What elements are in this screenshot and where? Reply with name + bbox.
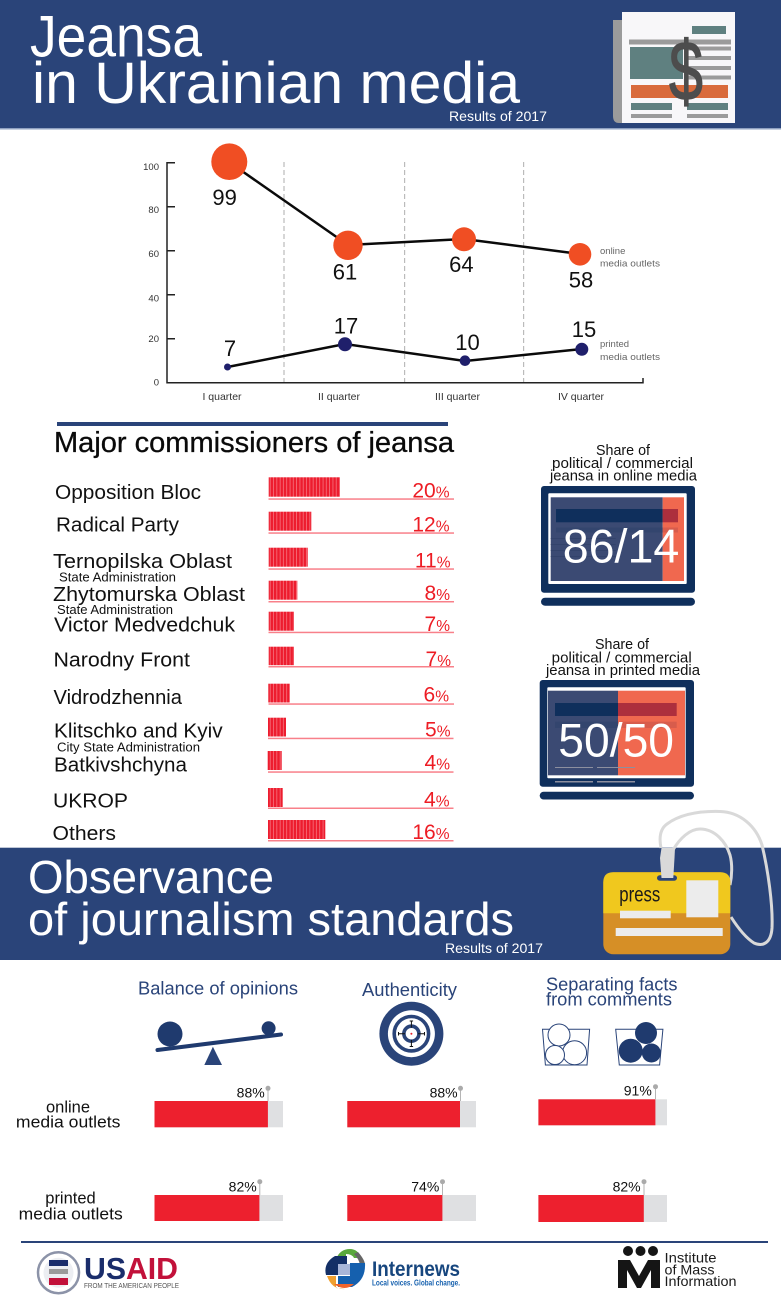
- percentages: 4%: [425, 751, 450, 774]
- bar: separating online 91%: [538, 1083, 667, 1125]
- bar: separating printed 82%: [538, 1179, 667, 1222]
- percentages: 4%: [424, 789, 450, 812]
- quarter labels: I quarter: [202, 391, 242, 403]
- percentages: 8%: [425, 582, 450, 605]
- bar: authenticity online 88%: 88%: [430, 1085, 458, 1101]
- axis labels: 80: [148, 205, 159, 216]
- names: City State Administration: [57, 741, 200, 755]
- online series: 58: [569, 268, 593, 292]
- caption: [545, 636, 701, 679]
- title: of journalism standards: [28, 893, 514, 945]
- quarter labels: III quarter: [435, 391, 480, 403]
- icon: laptop: 86/14: [563, 519, 679, 572]
- percentages: 11%: [415, 550, 451, 573]
- title: Jeansa: [30, 4, 203, 70]
- heading: Separating facts: [546, 975, 678, 995]
- column: separating facts from comments: [542, 975, 678, 1065]
- names: Victor Medvedchuk: [54, 615, 236, 637]
- online series: 99: [212, 185, 237, 210]
- caption: political / commercial: [552, 649, 692, 666]
- online series: [211, 143, 593, 292]
- percentages: 12%: [412, 514, 450, 537]
- legend: printed: [600, 339, 629, 350]
- legend: online: [600, 246, 625, 257]
- logo: Internews: [325, 1249, 460, 1289]
- names: UKROP: [53, 791, 128, 813]
- names: State Administration: [57, 603, 173, 617]
- percentages: [412, 480, 451, 844]
- bar: authenticity printed 74%: 74%: [411, 1179, 439, 1195]
- icon: basket with filled circles: [616, 1022, 663, 1065]
- logo: Institute of Mass Information: of Mass: [664, 1261, 714, 1277]
- row labels: media outlets: [19, 1205, 123, 1223]
- row labels: media outlets: [16, 1114, 120, 1132]
- row labels: online: [46, 1098, 90, 1116]
- printed series: [224, 314, 596, 370]
- icon: target: [379, 1002, 443, 1066]
- logo: USAID: [38, 1251, 179, 1293]
- logo: Internews: Internews: [372, 1258, 460, 1281]
- logo: USAID: FROM THE AMERICAN PEOPLE: [84, 1281, 179, 1290]
- quarter labels: II quarter: [318, 391, 361, 403]
- caption: [549, 442, 698, 485]
- logo: Institute of Mass Information: Institute: [664, 1250, 717, 1266]
- icon: press badge: [603, 811, 772, 954]
- panel: share in online media: [541, 442, 698, 606]
- bar chart: printed outlets standards: [154, 1179, 667, 1222]
- printed series: 10: [455, 330, 480, 355]
- icon: laptop: [540, 680, 694, 800]
- logo: USAID: USAID: [84, 1251, 178, 1286]
- quarter labels: IV quarter: [558, 391, 605, 403]
- legend: [600, 246, 660, 363]
- subtitle: Results of 2017: [445, 940, 543, 956]
- panel: share in printed media: [540, 636, 701, 800]
- percentages: 7%: [426, 648, 451, 671]
- legend: media outlets: [600, 352, 660, 363]
- axis labels: [143, 162, 159, 388]
- column: authenticity: [362, 980, 457, 1066]
- bar: balance printed 82%: [154, 1179, 283, 1221]
- caption: Share of: [595, 636, 650, 653]
- names: Batkivshchyna: [54, 755, 188, 777]
- panel: major commissioners: [52, 422, 455, 845]
- icon: laptop: [541, 486, 695, 606]
- percentages: 6%: [424, 684, 449, 707]
- row labels: [16, 1098, 123, 1223]
- caption: Share of: [596, 442, 651, 459]
- heading: from comments: [546, 990, 672, 1010]
- chart axes: [167, 163, 643, 383]
- bar: balance online 88%: [154, 1085, 283, 1127]
- icon: press badge: press: [619, 884, 660, 907]
- heading: Authenticity: [362, 980, 457, 1000]
- axis labels: 40: [148, 294, 159, 304]
- line chart: jeansa by quarter: [143, 143, 660, 403]
- caption: jeansa in printed media: [545, 662, 701, 679]
- axis labels: 60: [148, 249, 159, 260]
- names: Klitschko and Kyiv: [54, 721, 223, 743]
- underlines: [268, 498, 454, 842]
- icon: newspaper with dollar sign: $: [669, 24, 703, 118]
- bar chart: online outlets standards: [154, 1083, 667, 1127]
- heading: Major commissioners of jeansa: [54, 427, 455, 459]
- column: balance of opinions: [138, 978, 298, 1065]
- logo: Institute of Mass Information: Information: [664, 1273, 736, 1289]
- axis labels: 0: [154, 378, 159, 388]
- axis labels: 20: [148, 334, 159, 345]
- bar: balance printed 82%: 82%: [229, 1179, 257, 1195]
- legend: media outlets: [600, 258, 660, 270]
- striped bars: [268, 477, 340, 839]
- online series: 61: [333, 260, 357, 284]
- heading: [546, 975, 678, 1010]
- header: Jeansa in Ukrainian media: [0, 0, 781, 130]
- icon: basket with empty circles: [542, 1024, 590, 1065]
- axis labels: 100: [143, 162, 159, 173]
- printed series: 15: [572, 317, 596, 342]
- icon: seesaw: [158, 1021, 281, 1065]
- names: Ternopilska Oblast: [53, 551, 232, 573]
- footer: [21, 1241, 768, 1293]
- names: Others: [52, 823, 116, 845]
- online series: 64: [449, 252, 474, 277]
- logo: Internews: Local voices. Global change.: [372, 1279, 460, 1288]
- logo: Institute of Mass Information: [618, 1246, 736, 1289]
- names: Vidrodzhennia: [54, 687, 183, 709]
- printed series: 17: [334, 314, 358, 338]
- title: [28, 851, 514, 945]
- bar: separating online 91%: 91%: [624, 1083, 652, 1099]
- bar: authenticity printed 74%: [347, 1179, 476, 1221]
- bar: separating printed 82%: 82%: [613, 1179, 641, 1195]
- printed series: 7: [224, 336, 236, 361]
- title: in Ukrainian media: [32, 51, 521, 116]
- icon: newspaper with dollar sign: [613, 12, 735, 123]
- names: Narodny Front: [54, 650, 190, 672]
- heading: Balance of opinions: [138, 978, 298, 998]
- bar: balance online 88%: 88%: [237, 1085, 265, 1101]
- names: State Administration: [59, 571, 176, 585]
- percentages: 5%: [425, 719, 451, 742]
- title: Observance: [28, 851, 274, 903]
- row labels: printed: [45, 1190, 96, 1208]
- percentages: 16%: [412, 821, 450, 844]
- caption: jeansa in online media: [549, 468, 698, 485]
- names: Radical Party: [56, 515, 179, 537]
- subtitle: Results of 2017: [449, 108, 547, 124]
- percentages: 7%: [425, 613, 450, 636]
- percentages: 20%: [412, 480, 450, 503]
- icon: laptop: 50/50: [558, 714, 674, 767]
- names: Zhytomurska Oblast: [53, 584, 245, 606]
- bar: authenticity online 88%: [347, 1085, 476, 1127]
- title: [30, 4, 521, 116]
- names: Opposition Bloc: [55, 482, 201, 504]
- caption: political / commercial: [552, 455, 693, 472]
- header: Observance of journalism standards: [0, 811, 781, 960]
- quarter labels: [202, 391, 605, 403]
- names: [52, 482, 245, 845]
